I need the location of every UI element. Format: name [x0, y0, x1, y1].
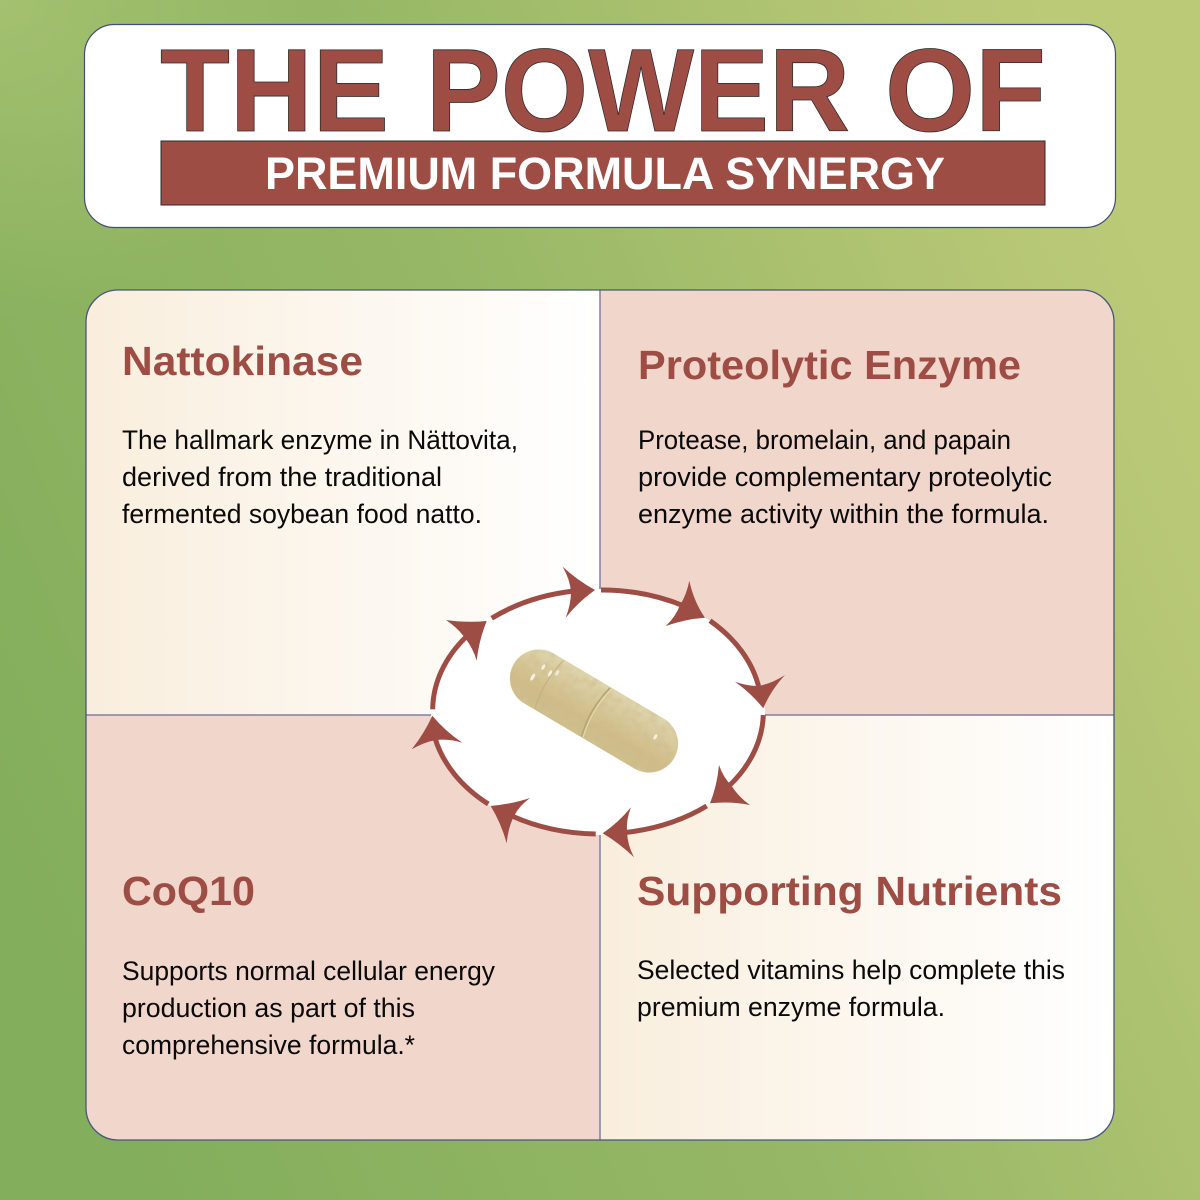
panel text: Nattokinase: [122, 338, 518, 529]
panel text: Supporting Nutrients: Supporting Nutrients: [637, 868, 1062, 914]
subtitle banner: PREMIUM FORMULA SYNERGY: [265, 148, 945, 199]
panel text: CoQ10: comprehensive formula.*: [122, 1030, 415, 1060]
subtitle banner: [161, 141, 1045, 205]
white centre ellipse: [431, 589, 765, 835]
title: the power of: [160, 25, 1046, 157]
arrow ring: [412, 567, 785, 857]
panel text: Nattokinase: Nattokinase: [122, 338, 363, 384]
panel text: Proteolytic Enzyme: provide complementary proteolytic: [638, 462, 1052, 492]
panel text: CoQ10: production as part of this: [122, 993, 415, 1023]
panel text: Nattokinase: The hallmark enzyme in Nättovita,: [122, 425, 518, 455]
panel: four ingredient quadrants: [86, 290, 1114, 1140]
title panel: [84, 24, 1116, 228]
panel text: Supporting Nutrients: Selected vitamins help complete this: [637, 955, 1065, 985]
panel text: Proteolytic Enzyme: enzyme activity within the formula.: [638, 499, 1049, 529]
panel text: Nattokinase: derived from the traditional: [122, 462, 442, 492]
panel text: Proteolytic Enzyme: [638, 342, 1052, 529]
title: the power of: THE: [160, 25, 389, 157]
panel text: Supporting Nutrients: [637, 868, 1065, 1022]
panel text: CoQ10: CoQ10: [122, 868, 255, 914]
panel text: Proteolytic Enzyme: Proteolytic Enzyme: [638, 342, 1021, 388]
panel text: Proteolytic Enzyme: Protease, bromelain, and papain: [638, 425, 1011, 455]
title: the power of: OF: [885, 25, 1046, 157]
panel text: Supporting Nutrients: premium enzyme formula.: [637, 992, 945, 1022]
panel text: CoQ10: [122, 868, 495, 1060]
centre cycle diagram: [412, 567, 785, 857]
icon: capsule: [499, 639, 689, 783]
title: the power of: POWER: [426, 25, 850, 157]
panel text: Nattokinase: fermented soybean food natto.: [122, 499, 482, 529]
panel text: CoQ10: Supports normal cellular energy: [122, 956, 495, 986]
